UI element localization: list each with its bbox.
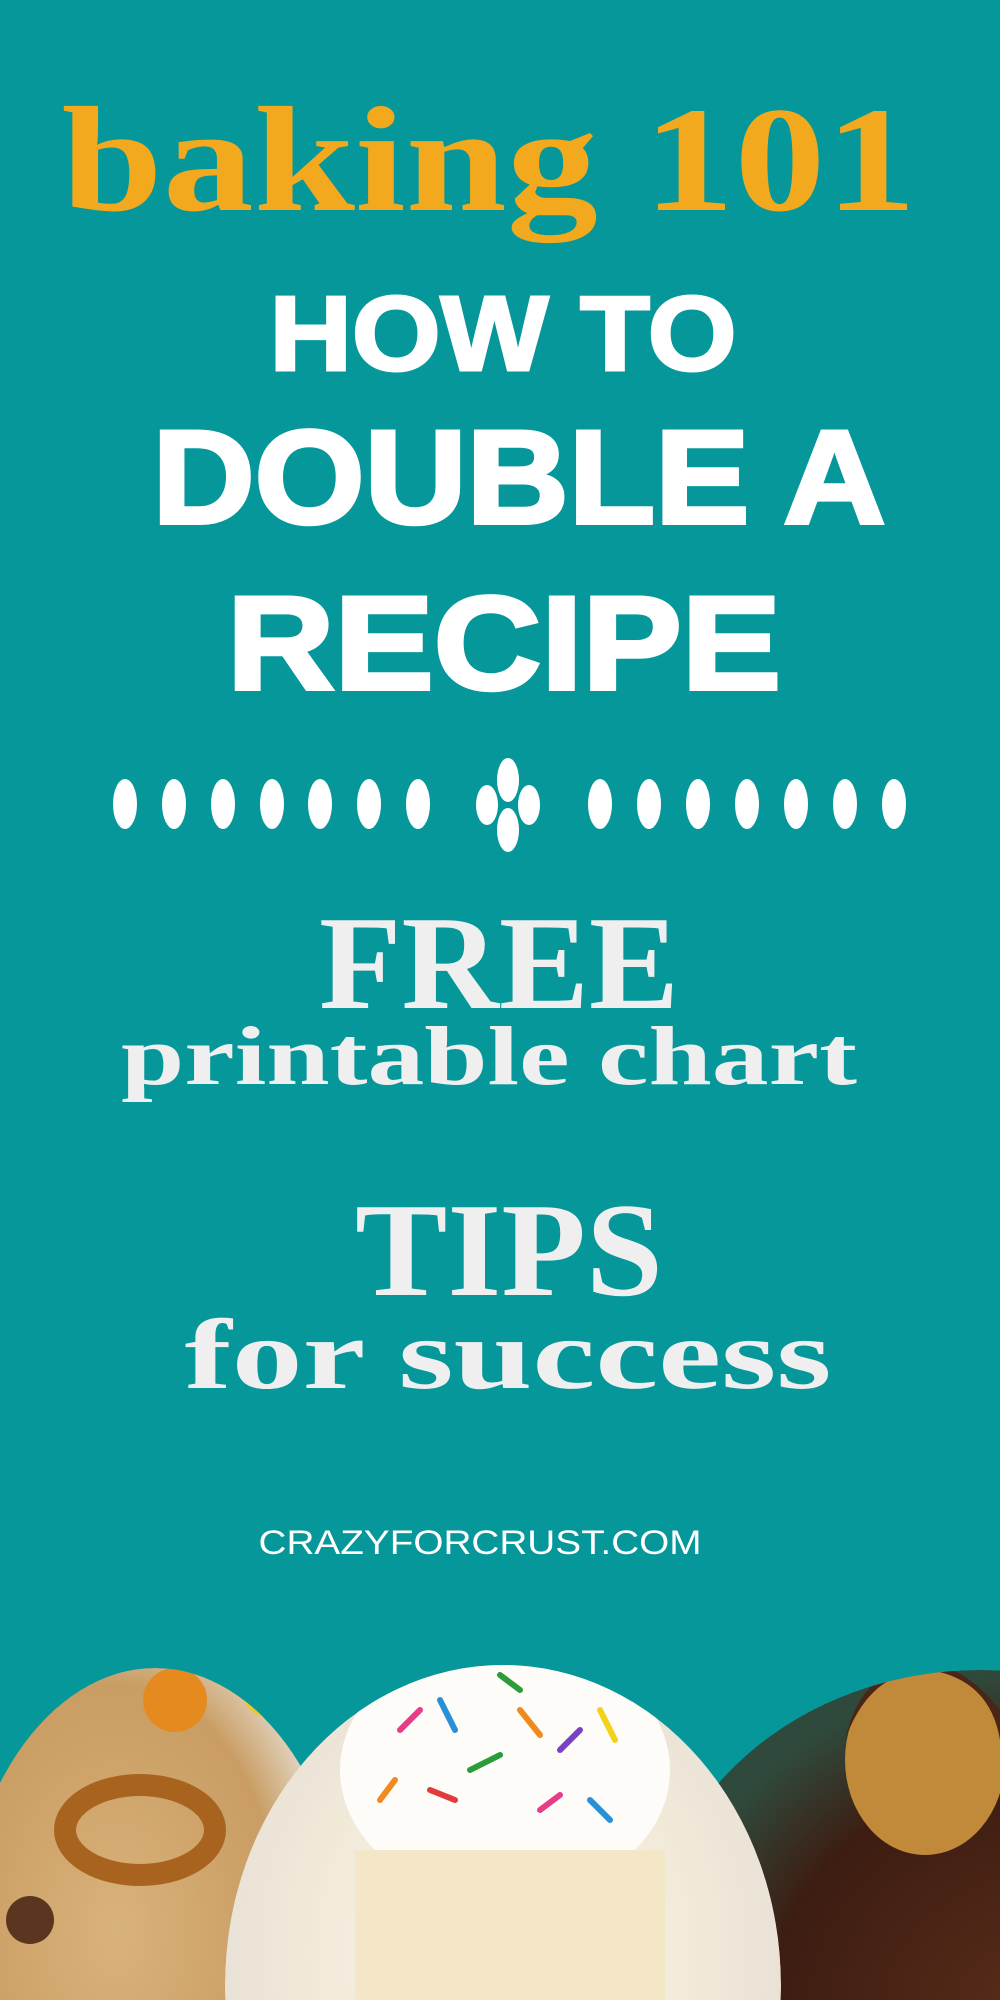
text: TIPS: TIPS bbox=[355, 1176, 663, 1324]
photo: cupcake bbox=[225, 1640, 781, 2000]
photo: right chocolate bbox=[718, 1670, 1000, 2000]
heading: HOW TO: HOW TO bbox=[270, 275, 736, 393]
heading: RECIPE: RECIPE bbox=[227, 570, 781, 718]
heading: DOUBLE A: DOUBLE A bbox=[152, 404, 886, 552]
title: baking 101: baking 101 bbox=[62, 77, 916, 243]
text: printable chart: printable chart bbox=[121, 1010, 857, 1103]
divider: dots with flourish bbox=[113, 758, 906, 852]
photo: cookie bbox=[0, 1668, 300, 2000]
text: FREE: FREE bbox=[319, 889, 679, 1037]
website url: CRAZYFORCRUST.COM bbox=[258, 1524, 702, 1562]
text: for success: for success bbox=[184, 1299, 832, 1410]
